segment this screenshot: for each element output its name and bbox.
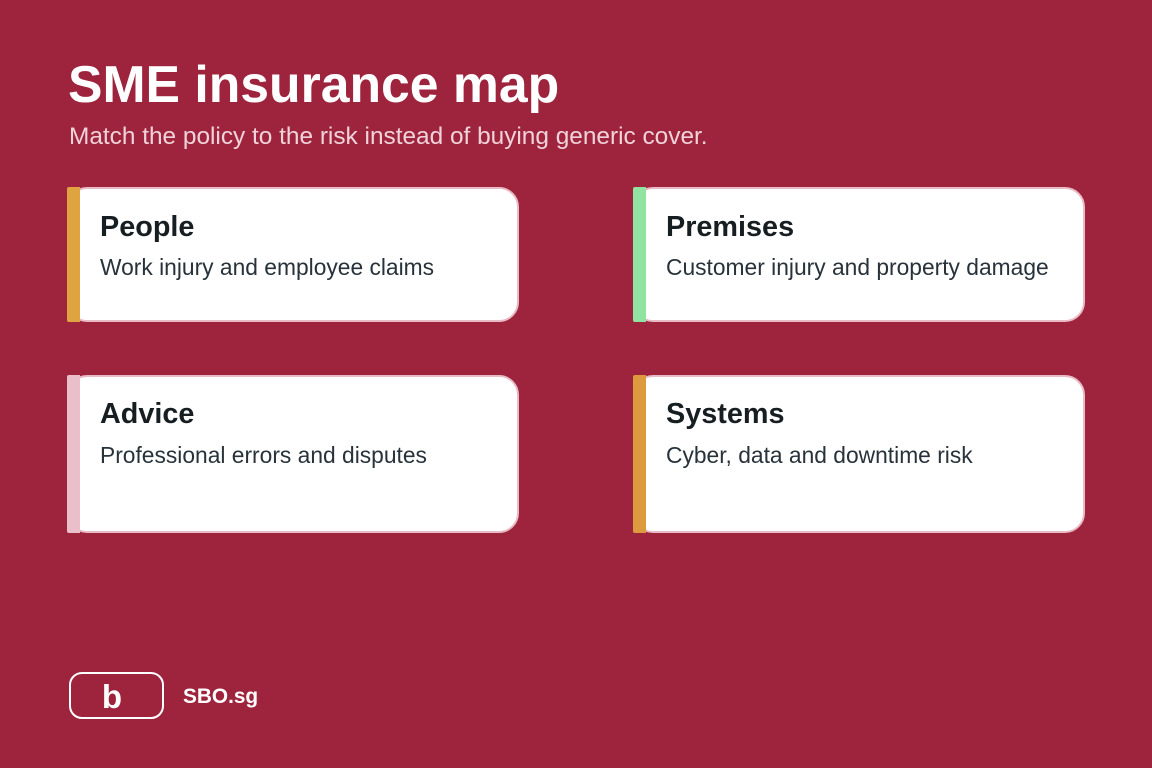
logo badge — [69, 672, 164, 719]
card background — [67, 375, 519, 533]
accent bar: orange — [633, 375, 646, 533]
panel: Premises — [633, 187, 1085, 322]
text: Advice description: Professional errors and disputes — [100, 442, 427, 468]
accent bar: green — [633, 187, 646, 322]
text: Systems description: Cyber, data and downtime risk — [666, 442, 973, 468]
panel: Advice — [67, 375, 519, 533]
panel: Systems — [633, 375, 1085, 533]
text: Premises description: Customer injury and property damage — [666, 254, 1049, 280]
card background — [67, 187, 519, 322]
card background — [633, 375, 1085, 533]
panel: People — [67, 187, 519, 322]
heading: Systems: Systems — [666, 398, 784, 430]
logo badge: b — [102, 678, 122, 715]
brand name: SBO.sg — [183, 685, 258, 708]
card background — [633, 187, 1085, 322]
heading: Advice: Advice — [100, 398, 194, 430]
accent bar: pink — [67, 375, 80, 533]
heading: People: People — [100, 211, 194, 243]
footer logo — [69, 672, 258, 719]
text: People description: Work injury and employee claims — [100, 254, 434, 280]
subtitle: Match the policy to the risk instead of buying generic cover. — [69, 123, 708, 150]
title: SME insurance map — [68, 55, 559, 113]
accent bar: orange — [67, 187, 80, 322]
heading: Premises: Premises — [666, 211, 794, 243]
